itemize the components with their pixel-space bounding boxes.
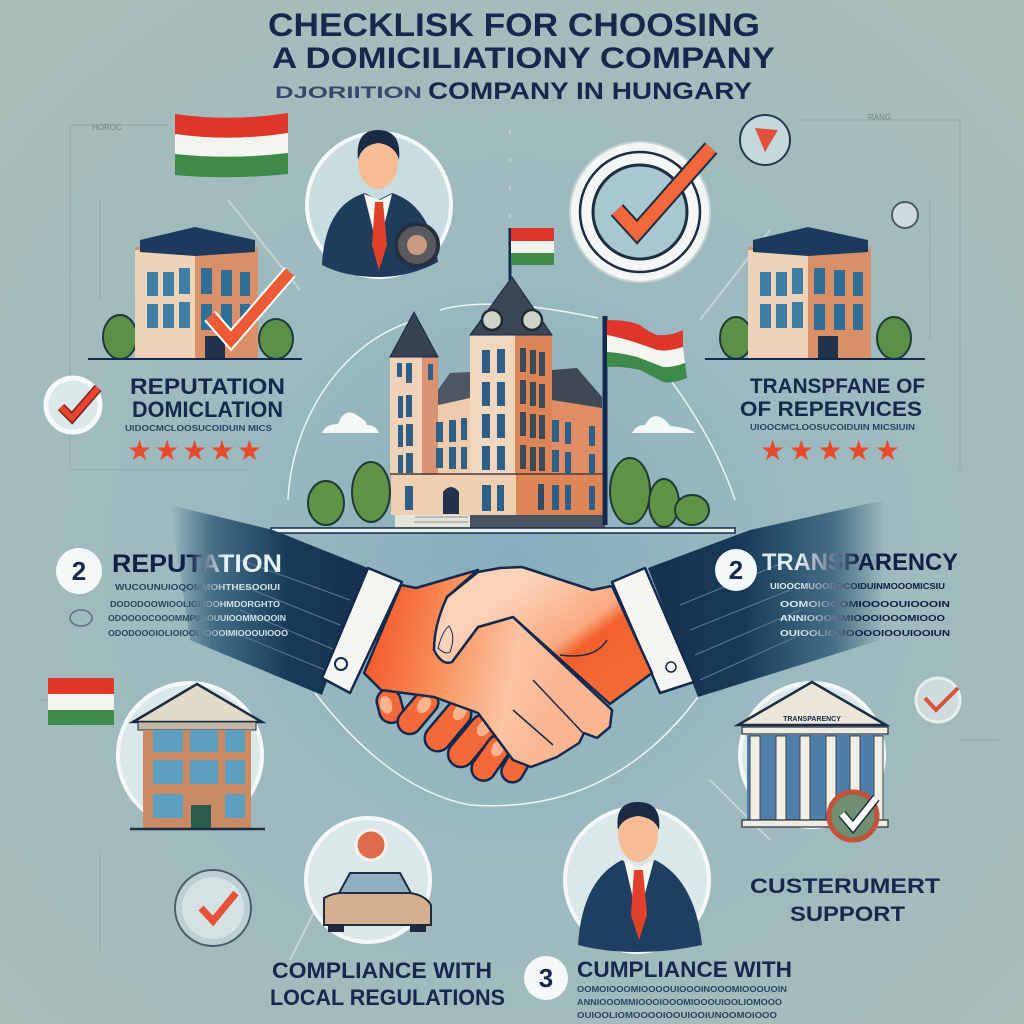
text: compliance left: COMPLIANCE WITH [272, 958, 492, 983]
text: reputation section: ODODOOOIOLIOIOOUIOOOIMIOOOUIOOO [108, 629, 288, 638]
thumb nail [438, 626, 453, 653]
text: transparency of services: UIOOCMCLOOSUCOIDUIN MICSIUIN [750, 423, 915, 432]
text: reputation section: WUCOUNUIOQOMMOHTHESOOIUI [115, 583, 280, 592]
ground plate [271, 528, 735, 533]
title: DJORIITION [275, 83, 422, 102]
number badge 3 [524, 956, 568, 1000]
flag: top left [175, 113, 288, 177]
right cuff [612, 568, 694, 693]
panel: bank right: TRANSPARENCY [783, 716, 841, 723]
badge: check bottom [175, 870, 251, 946]
text: compliance right: ANNIOOOMMIOOOIOOOMIOOOUIOOLIOMOOO [577, 998, 782, 1007]
panel: central castle [271, 228, 735, 533]
panel: office left [118, 683, 265, 829]
text: reputation domiciliation [125, 374, 285, 433]
main tower [470, 335, 515, 475]
text: reputation domiciliation: DOMICLATION [132, 397, 283, 422]
badge: check left [46, 378, 100, 432]
number badge 2 left: 2 [72, 556, 86, 586]
panel: stamp with check [570, 142, 711, 282]
panel: person bottom [565, 802, 709, 952]
panel: building left [88, 227, 302, 359]
number badge 2 right [715, 549, 757, 591]
right sleeve [648, 500, 885, 697]
text: customer support [750, 875, 940, 926]
text: compliance right: OOMOIOOOMIOOOOUIOOOINOOOMIOOOUOIN [577, 985, 787, 994]
text: reputation section: ODOOOOCOOOMMPIIGOUUIOOMMOOOIN [108, 614, 286, 623]
trees [308, 458, 709, 527]
castle windows [397, 348, 595, 514]
handshake [322, 567, 694, 786]
badge: top right [740, 115, 790, 165]
text: compliance right: CUMPLIANCE WITH [577, 957, 792, 982]
right hand with thumb [434, 567, 652, 704]
text: transparency section: OUIOOLIOMOOOOIOOUIOOIUN [780, 629, 950, 638]
text: reputation section [108, 550, 288, 638]
faint corner labels [92, 113, 891, 132]
number badge 3: 3 [539, 963, 553, 993]
title: CHECKLISK FOR CHOOSING [268, 7, 760, 43]
text: reputation section: DODODOOWIOOLIGIIIOOHMDORGHTO [110, 600, 280, 609]
panel: car [306, 818, 431, 942]
text: transparency section: OOMOIOOOMIOOOOUIOOOIN [780, 600, 950, 609]
title: A DOMICILIATIONY COMPANY [272, 42, 775, 75]
text: reputation section: REPUTATION [112, 550, 282, 578]
cufflink right [666, 662, 676, 672]
panel: building right [705, 227, 925, 359]
panel: bank right [738, 682, 888, 840]
tower flag [510, 228, 554, 280]
stars left: ★★★★★ [127, 434, 262, 467]
large flag [605, 316, 687, 525]
left cuff [322, 568, 402, 693]
badge: small right [892, 202, 918, 228]
decorative guide lines [40, 120, 1000, 960]
central circle arcs [288, 304, 735, 806]
cufflink left [335, 658, 347, 670]
text: customer support: CUSTERUMERT [750, 875, 940, 898]
faint corner labels: HOROC [92, 123, 122, 132]
text: compliance right: OUIOOLIOMOOOOIOOUIOOIUNOOMOIOOO [577, 1011, 777, 1020]
left tower [390, 357, 422, 475]
text: transparency section [762, 549, 958, 638]
text: transparency of services: TRANSPFANE OF [750, 375, 925, 398]
faint corner labels: RANG [868, 113, 891, 122]
fingers [374, 685, 533, 786]
panel: person top [307, 130, 451, 277]
text: transparency of services: OF REPERVICES [740, 398, 922, 421]
crease [513, 640, 607, 745]
palm [364, 570, 612, 767]
clouds [322, 412, 379, 433]
text: transparency of services [740, 375, 925, 432]
text: customer support: SUPPORT [790, 903, 905, 926]
left sleeve [170, 505, 368, 695]
base floor [391, 475, 516, 515]
small ring icon left [70, 610, 92, 626]
text: compliance right [577, 957, 792, 1020]
title: COMPANY IN HUNGARY [428, 78, 752, 105]
text: transparency section: TRANSPARENCY [762, 549, 958, 576]
number badge 2 left [56, 548, 102, 594]
number badge 2 right: 2 [729, 555, 743, 585]
title [268, 7, 775, 105]
badge: right check [916, 678, 960, 722]
flag: bottom left [48, 678, 114, 725]
fingernails [378, 694, 508, 759]
text: reputation domiciliation: UIDOCMCLOOSUCOIDUIN MICS [125, 424, 273, 433]
text: compliance left [270, 958, 505, 1010]
stars right: ★★★★★ [760, 434, 900, 467]
wings [425, 398, 470, 475]
castle body [390, 277, 605, 528]
text: transparency section: UIOOCMUOODOCOIDUINMOOOMICSIU [770, 582, 945, 591]
text: compliance left: LOCAL REGULATIONS [270, 985, 505, 1010]
text: reputation domiciliation: REPUTATION [130, 374, 285, 399]
text: transparency section: ANNIOOOMMIOOOIOOOMIOOO [780, 614, 945, 623]
